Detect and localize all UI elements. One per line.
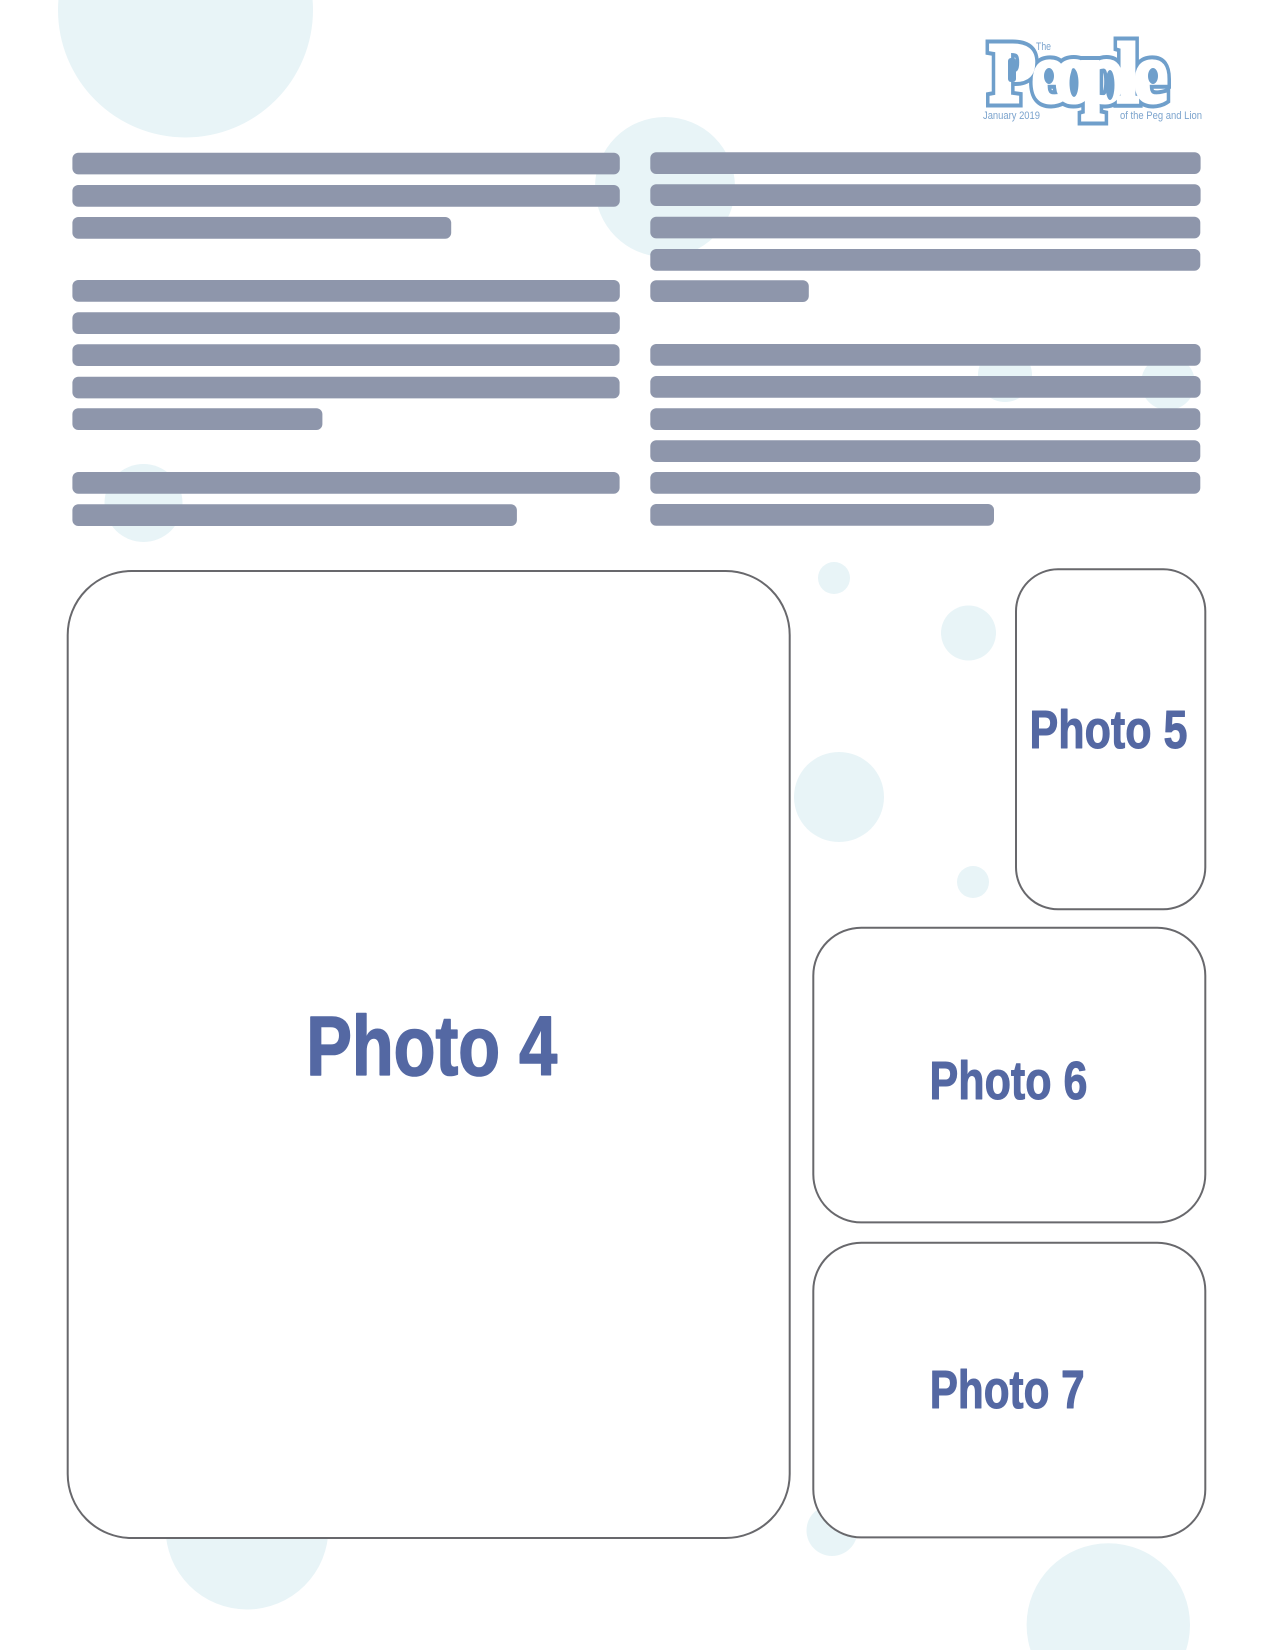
logo text: date: January 2019 [983, 110, 1040, 122]
photo frame 5 [1016, 569, 1205, 909]
logo: The People [983, 27, 1202, 122]
label: Photo 4: Photo 4 [306, 999, 557, 1093]
label: Photo 6: Photo 6 [930, 1051, 1088, 1111]
paragraph 2 placeholder lines [72, 280, 620, 430]
left text column placeholder [72, 153, 620, 526]
label: Photo 7: Photo 7 [930, 1360, 1085, 1420]
logo text: The: The [1036, 41, 1051, 53]
logo text: tagline: of the Peg and Lion [1120, 110, 1202, 122]
paragraph 4 placeholder lines [650, 152, 1201, 302]
paragraph 5 placeholder lines [650, 344, 1201, 526]
photo frame 7 [813, 1243, 1205, 1537]
photo frame 6 [813, 928, 1205, 1222]
label: Photo 5: Photo 5 [1030, 700, 1188, 760]
logo wordmark: People [990, 27, 1167, 120]
paragraph 1 placeholder lines [72, 153, 620, 239]
paragraph 3 placeholder lines [72, 472, 620, 526]
right text column placeholder [650, 152, 1201, 526]
logo wordmark: People [990, 27, 1167, 120]
